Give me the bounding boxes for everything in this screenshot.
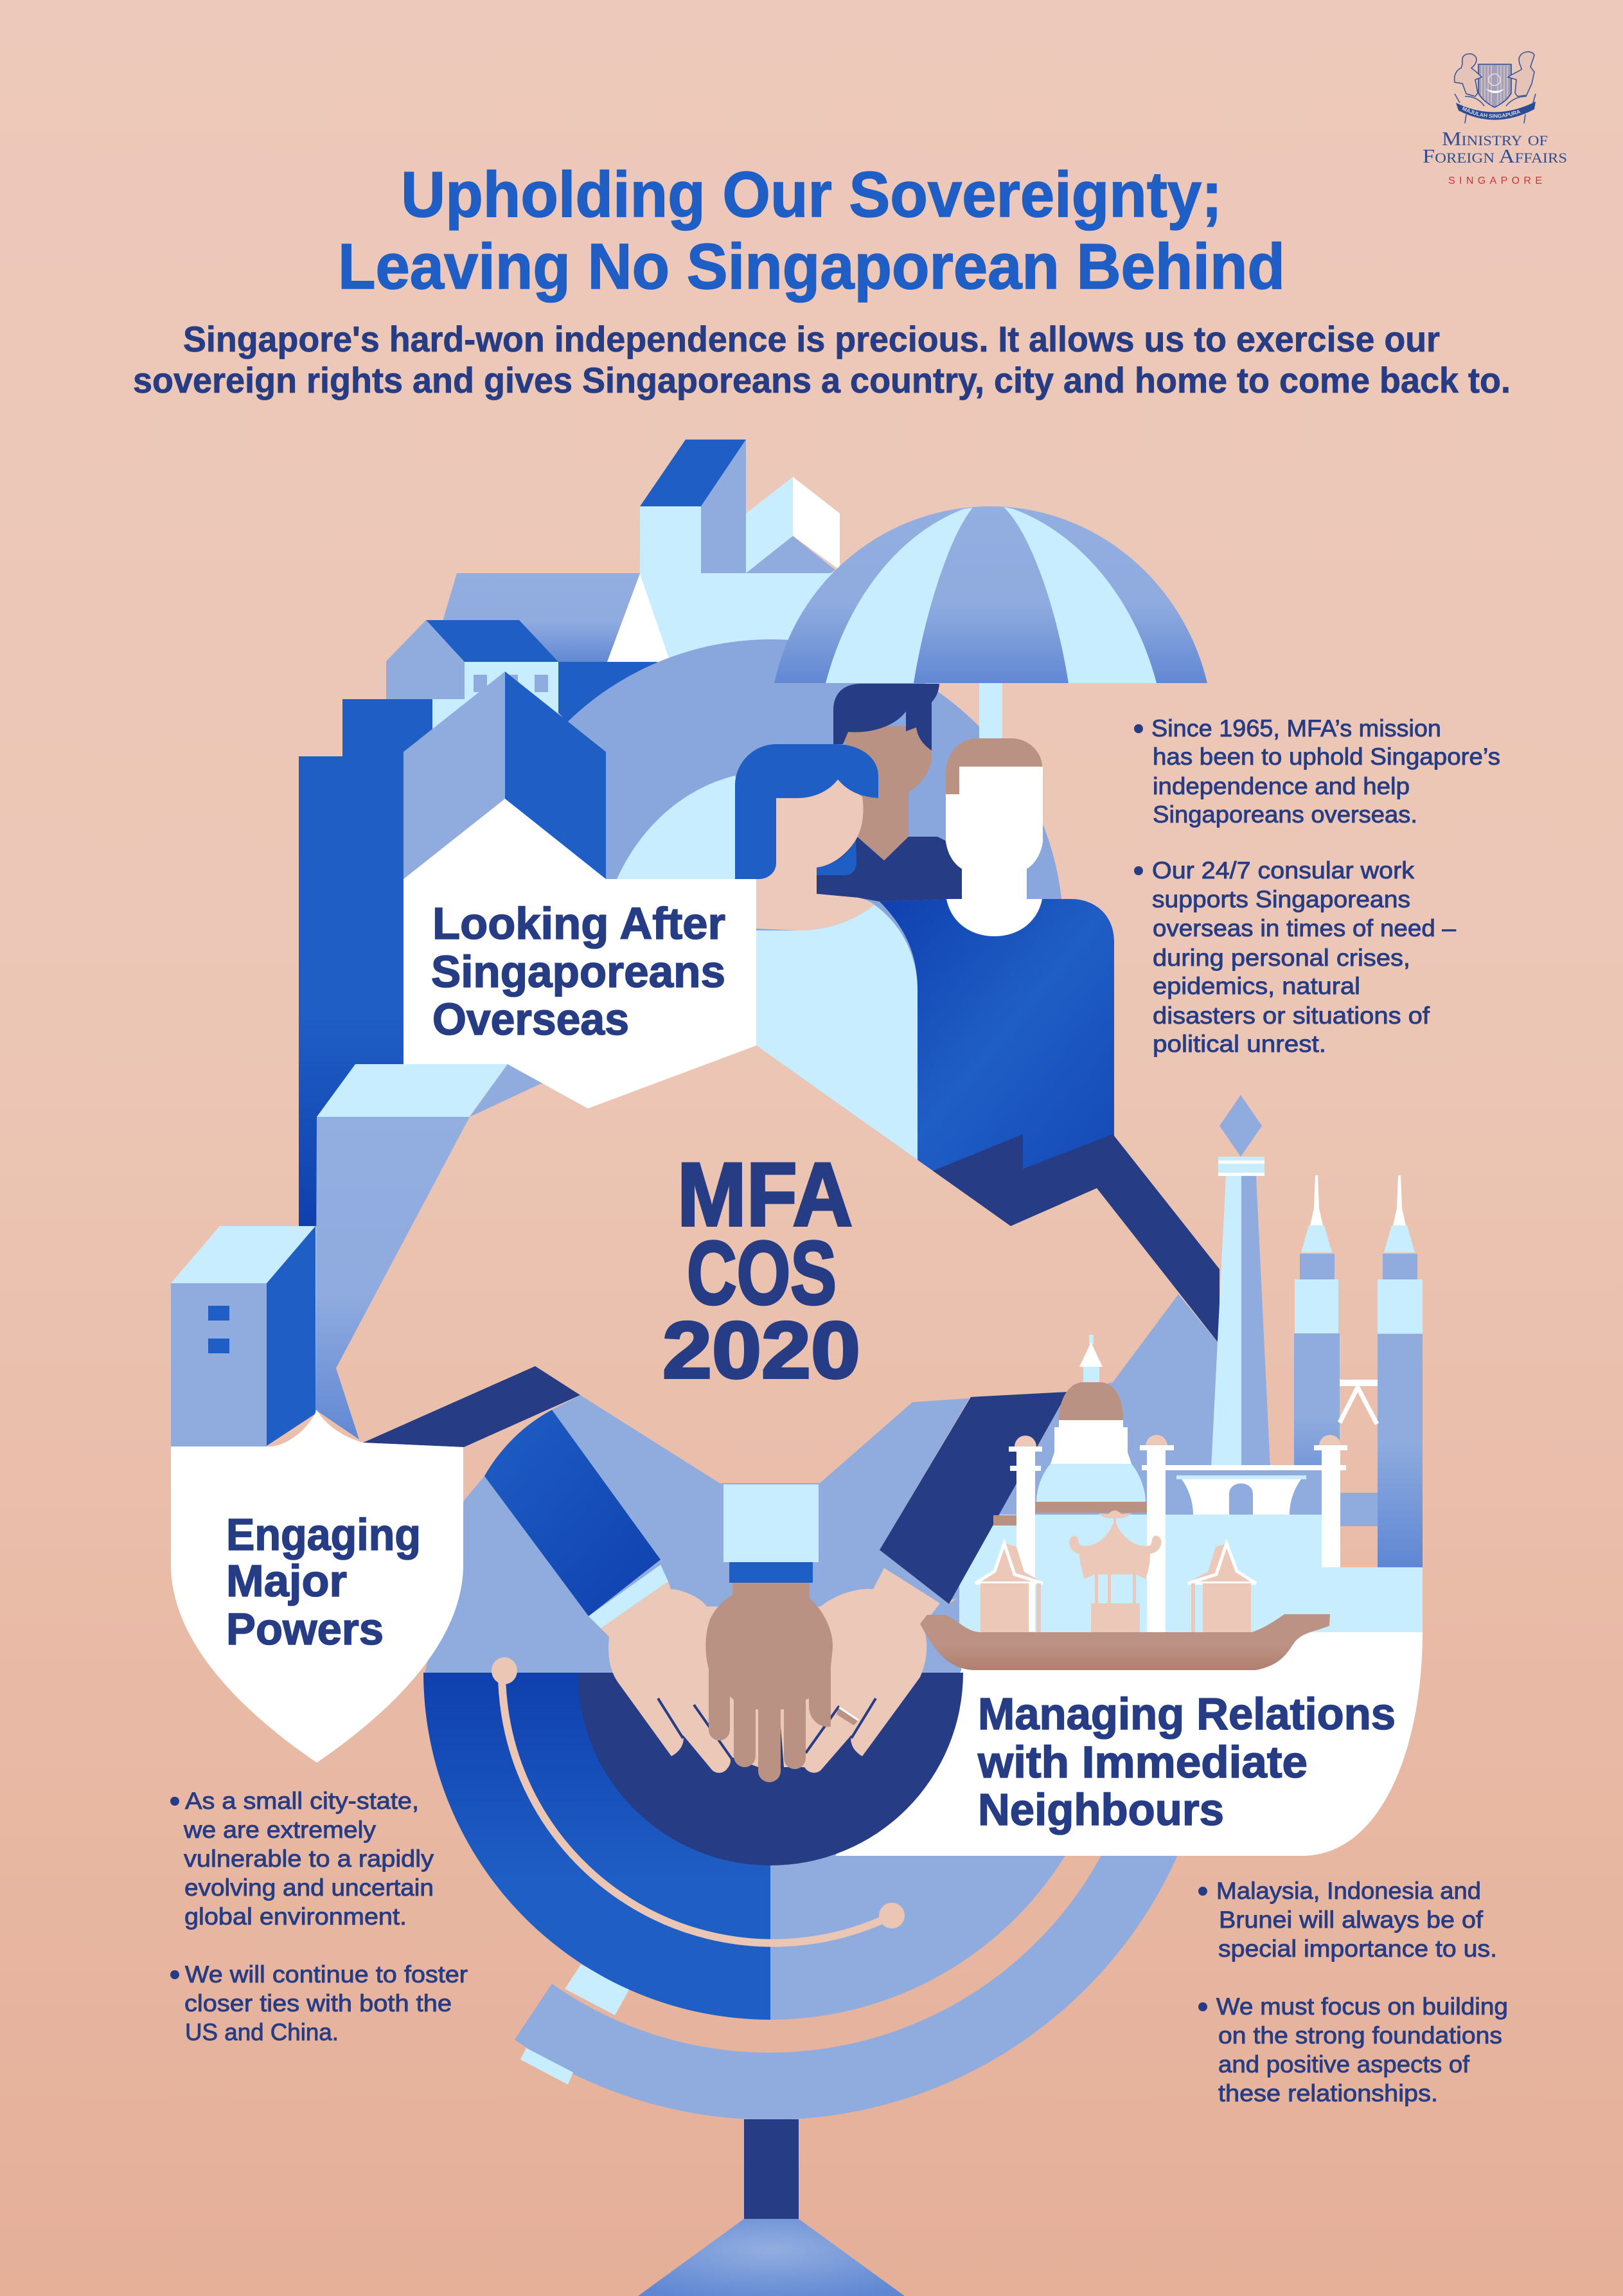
- text: Engaging Major Powers bullets: US and China.: [185, 2019, 339, 2045]
- text: Looking After bullets: epidemics, natural: [1153, 973, 1360, 999]
- light ground behind church: [640, 506, 842, 668]
- text: Looking After bullets: [1134, 715, 1500, 1057]
- text: Looking After bullets: Singaporeans overseas.: [1153, 801, 1417, 828]
- logo text: [1423, 127, 1567, 186]
- panel: Managing Relations with Immediate Neighbours: [835, 1632, 1423, 1856]
- umbrella pole: [979, 683, 1002, 754]
- back man: [817, 684, 962, 902]
- text: Immediate Neighbours bullets: these relationships.: [1218, 2080, 1438, 2106]
- heading: Powers: [226, 1604, 384, 1654]
- text: Looking After bullets: during personal crises,: [1153, 945, 1410, 971]
- boat: [920, 1614, 1330, 1670]
- second building: [315, 1064, 540, 1439]
- title: MFA COS 2020: COS: [687, 1222, 837, 1323]
- right sleeve: [880, 1392, 1068, 1604]
- panel: Engaging Major Powers shield: [171, 1410, 463, 1763]
- outer ring: [515, 1851, 1180, 2120]
- subtitle: sovereign rights and gives Singaporeans a country, city and home to come back to.: [133, 360, 1511, 400]
- arch: [1166, 1470, 1322, 1515]
- navy strip left: [363, 1366, 580, 1447]
- text: Looking After bullets: supports Singaporeans: [1152, 886, 1410, 912]
- heading: Neighbours: [978, 1784, 1224, 1835]
- shirt cuff: [723, 1484, 819, 1562]
- text: Immediate Neighbours bullets: special importance to us.: [1218, 1936, 1497, 1962]
- mosque: [1035, 1335, 1147, 1513]
- illustration: umbrella: [774, 506, 1207, 754]
- left sleeve: [484, 1410, 661, 1616]
- text: Engaging Major Powers bullets: we are extremely: [183, 1817, 377, 1843]
- title: Upholding Our Sovereignty;: [401, 159, 1222, 231]
- finger lines: [658, 1698, 876, 1761]
- ring tabs: [565, 1964, 630, 2015]
- text: Looking After bullets: independence and help: [1153, 773, 1410, 799]
- stepped blue tower: [299, 699, 432, 1226]
- right pavilion: [1188, 1544, 1256, 1632]
- text: Looking After bullets: Our 24/7 consular work: [1152, 857, 1415, 884]
- suit: [425, 1395, 970, 1674]
- text: Immediate Neighbours bullets: [1198, 1878, 1508, 2106]
- text: Engaging Major Powers bullets: global environment.: [184, 1903, 407, 1930]
- ring: [837, 1707, 858, 1725]
- text: Engaging Major Powers bullets: We will continue to foster: [185, 1961, 468, 1988]
- left cuff: [589, 1565, 668, 1628]
- globe arc marker: [492, 1657, 905, 1943]
- text: Looking After bullets: disasters or situations of: [1153, 1002, 1430, 1029]
- heading: [977, 1689, 1396, 1835]
- text: Looking After bullets: overseas in times of need –: [1153, 915, 1456, 941]
- title: [338, 159, 1285, 303]
- heading: Overseas: [432, 994, 629, 1044]
- navy arm strip right: [933, 1134, 1219, 1344]
- icon: crest: [1453, 51, 1536, 123]
- text: Engaging Major Powers bullets: closer ties with both the: [184, 1990, 452, 2016]
- globe right half: [770, 1673, 1117, 2020]
- text: Engaging Major Powers bullets: [170, 1788, 468, 2045]
- text: Immediate Neighbours bullets: Malaysia, Indonesia and: [1216, 1878, 1481, 1904]
- logo text: Foreign Affairs: [1423, 145, 1567, 167]
- right hand: [771, 1568, 940, 1773]
- text: Looking After bullets: Since 1965, MFA’s mission: [1151, 715, 1441, 742]
- panel: centre MFA COS shape: [336, 1046, 1178, 1483]
- text: Immediate Neighbours bullets: on the strong foundations: [1218, 2022, 1502, 2049]
- white triangle: [607, 574, 670, 662]
- text: Looking After bullets: has been to uphold Singapore’s: [1153, 743, 1500, 770]
- church: [640, 440, 746, 573]
- subtitle: [133, 319, 1511, 400]
- icon: crest: MAJULAH SINGAPURA: [1462, 107, 1521, 118]
- text: Immediate Neighbours bullets: We must focus on building: [1216, 1993, 1508, 2020]
- gabled building: [404, 672, 606, 879]
- heading: Looking After: [432, 898, 725, 948]
- globe inner navy disc: [578, 1673, 963, 1865]
- twin tower right: [1378, 1175, 1423, 1569]
- pagoda column openings: [1098, 1574, 1133, 1603]
- canopy: [774, 506, 1207, 683]
- small building: [171, 1226, 315, 1450]
- title: Leaving No Singaporean Behind: [338, 231, 1285, 303]
- illustration: suit and sleeves: [363, 1366, 970, 1674]
- brown band: [993, 1515, 1016, 1526]
- heading: with Immediate: [977, 1737, 1308, 1787]
- large arch: [479, 639, 1063, 1224]
- heading: Managing Relations: [978, 1689, 1396, 1739]
- light arc: [617, 776, 771, 879]
- logo text: SINGAPORE: [1448, 175, 1542, 186]
- periwinkle sliver: [472, 1060, 553, 1116]
- pagoda: [1069, 1510, 1161, 1632]
- blue band: [729, 1562, 813, 1583]
- title: MFA COS 2020: MFA: [677, 1144, 853, 1245]
- title: MFA COS 2020: [662, 1144, 860, 1395]
- illustration: globe: [423, 1657, 1180, 2296]
- text: Looking After bullets: political unrest.: [1153, 1031, 1326, 1057]
- heading: Singaporeans: [431, 947, 725, 997]
- light base: [959, 1515, 1423, 1632]
- base: [638, 2219, 905, 2296]
- hill: [438, 573, 640, 662]
- illustration: three people: [735, 684, 1114, 1182]
- logo text: Ministry of: [1442, 127, 1548, 150]
- heading: Engaging: [226, 1509, 421, 1560]
- text: Engaging Major Powers bullets: vulnerable to a rapidly: [184, 1846, 434, 1872]
- left pavilion: [975, 1544, 1043, 1633]
- woman: [735, 744, 918, 1160]
- skybridge: [1340, 1380, 1378, 1526]
- illustration: left buildings: [171, 1064, 540, 1450]
- stand: [744, 2119, 799, 2219]
- text: Immediate Neighbours bullets: Brunei will always be of: [1219, 1907, 1484, 1933]
- globe left half: [423, 1673, 770, 2020]
- illustration: neighbours temple scene: [880, 1335, 1423, 1670]
- small house: [746, 477, 840, 573]
- KL tower: [1211, 1095, 1270, 1468]
- title: MFA COS 2020: 2020: [662, 1306, 860, 1395]
- left hand: [601, 1581, 758, 1773]
- pillars: [1009, 1435, 1347, 1632]
- panel: Looking After Singaporeans Overseas: [404, 799, 756, 1108]
- blue roof house: [386, 620, 558, 733]
- front man: [880, 738, 1114, 1182]
- heading: [431, 898, 725, 1044]
- logo: Ministry of Foreign Affairs: [1423, 51, 1567, 186]
- heading: [226, 1509, 421, 1654]
- blue wedge: [558, 662, 658, 722]
- illustration: city skyline behind people: [299, 440, 1063, 1226]
- brown hand: [705, 1583, 833, 1783]
- twin tower left: [1294, 1175, 1340, 1517]
- subtitle: Singapore's hard-won independence is precious. It allows us to exercise our: [183, 319, 1440, 359]
- text: Engaging Major Powers bullets: evolving and uncertain: [184, 1874, 434, 1901]
- text: Engaging Major Powers bullets: As a small city-state,: [185, 1788, 419, 1814]
- heading: Major: [226, 1556, 347, 1606]
- illustration: periwinkle backdrop and skyline: [951, 1095, 1423, 1600]
- text: Immediate Neighbours bullets: and positive aspects of: [1218, 2051, 1470, 2078]
- illustration: clasped hands: [601, 1484, 940, 1783]
